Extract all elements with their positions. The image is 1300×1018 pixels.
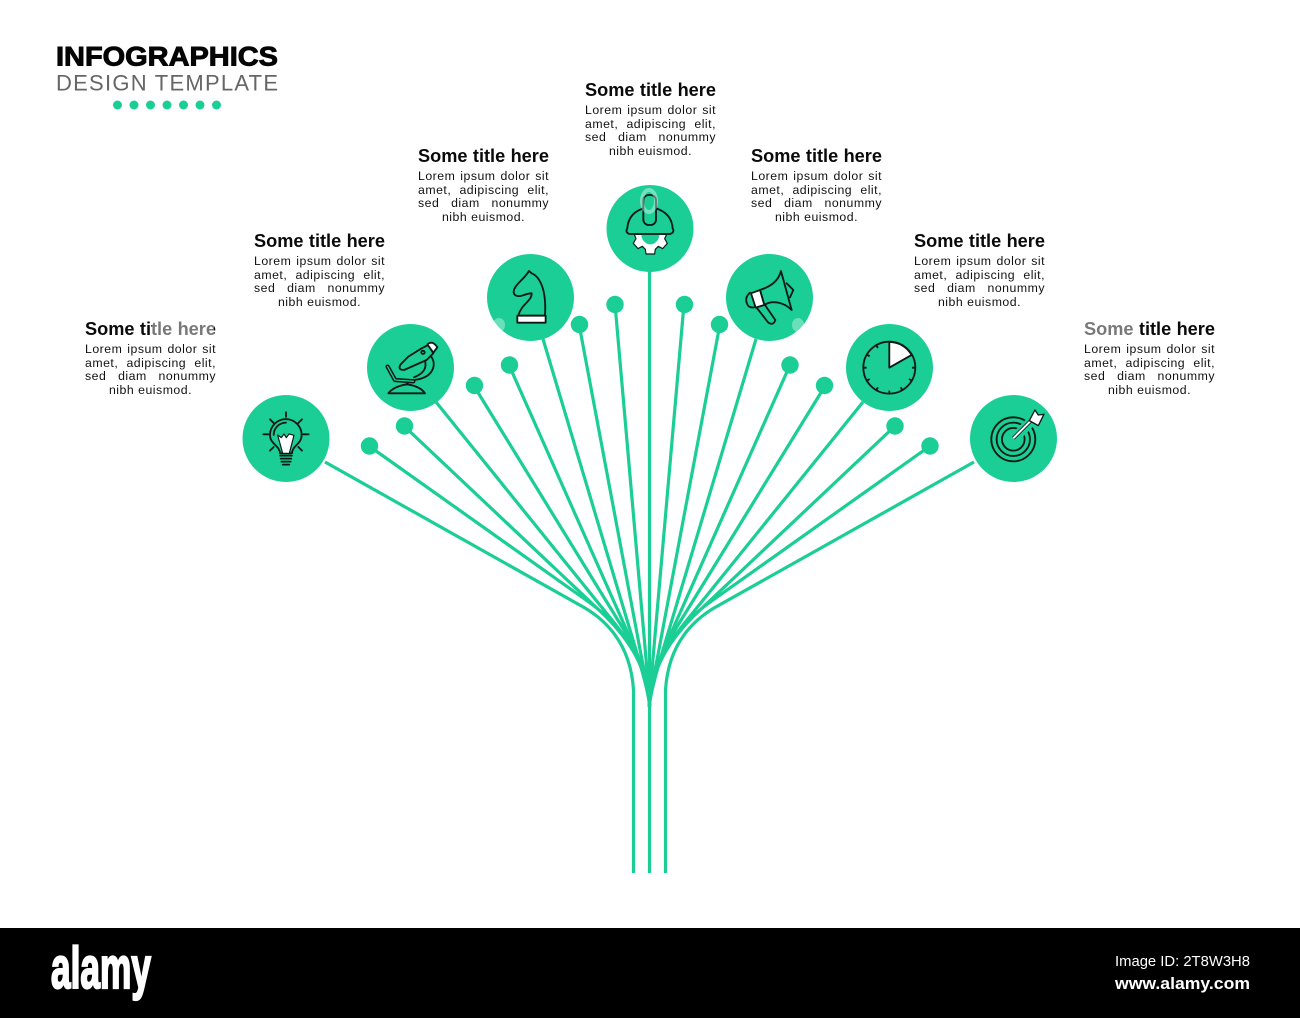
- text block 5: Some title here: [751, 146, 882, 166]
- icon circle: chess knight: [487, 254, 574, 341]
- text block 6: Some title here: [914, 231, 1045, 251]
- text block 6: amet, adipiscing elit,: [914, 268, 1045, 282]
- icon: helmet and gear: [627, 195, 673, 254]
- text block 7: Some title here: [1084, 319, 1215, 339]
- icon circle: light bulb: [242, 395, 330, 482]
- icon circle: helmet and gear: [606, 185, 694, 272]
- text block 6: sed diam nonummy: [914, 281, 1045, 295]
- icon circle: megaphone: [726, 254, 813, 341]
- text block 4: amet, adipiscing elit,: [585, 117, 716, 131]
- title: DESIGN TEMPLATE: [56, 70, 278, 96]
- footer image id: Image ID: 2T8W3H8: [1115, 953, 1250, 970]
- branch end dots: [361, 296, 939, 455]
- text block 5: nibh euismod.: [775, 210, 858, 224]
- title: [56, 42, 278, 96]
- text block 5: Lorem ipsum dolor sit: [751, 169, 882, 183]
- text block 1: sed diam nonummy: [85, 369, 216, 383]
- text block 7: Lorem ipsum dolor sit: [1084, 342, 1215, 356]
- footer url: www.alamy.com: [1114, 974, 1250, 993]
- text block 2: amet, adipiscing elit,: [254, 268, 385, 282]
- text block 5: [751, 146, 882, 224]
- text block 2: [254, 231, 385, 309]
- text block 6: Lorem ipsum dolor sit: [914, 254, 1045, 268]
- text block 6: nibh euismod.: [938, 295, 1021, 309]
- text block 4: [585, 80, 716, 158]
- icon circle: microscope: [367, 324, 454, 411]
- text block 3: Lorem ipsum dolor sit: [418, 169, 549, 183]
- text block 1: amet, adipiscing elit,: [85, 356, 216, 370]
- icon: clock: [863, 342, 915, 394]
- text block 2: Lorem ipsum dolor sit: [254, 254, 385, 268]
- text block 4: nibh euismod.: [609, 144, 692, 158]
- title dots: [113, 100, 221, 110]
- icon: light bulb: [263, 412, 309, 465]
- text block 1: Lorem ipsum dolor sit: [85, 342, 216, 356]
- text block 4: sed diam nonummy: [585, 130, 716, 144]
- icon: megaphone: [746, 271, 793, 324]
- text block 5: amet, adipiscing elit,: [751, 183, 882, 197]
- text block 1: nibh euismod.: [109, 383, 192, 397]
- footer logo: alamy: [51, 936, 151, 1001]
- text block 2: sed diam nonummy: [254, 281, 385, 295]
- text block 7: sed diam nonummy: [1084, 369, 1215, 383]
- text block 4: Some title here: [585, 80, 716, 100]
- text block 4: Lorem ipsum dolor sit: [585, 103, 716, 117]
- icon: chess knight: [514, 271, 546, 323]
- tree stem and branch lines: [325, 270, 974, 873]
- text block 3: sed diam nonummy: [418, 196, 549, 210]
- text block 3: amet, adipiscing elit,: [418, 183, 549, 197]
- text block 5: sed diam nonummy: [751, 196, 882, 210]
- icon circle: clock: [846, 324, 933, 411]
- icon: microscope: [388, 343, 437, 393]
- text block 3: [418, 146, 549, 224]
- icon circle: target: [970, 395, 1057, 482]
- text block 1: Some title here: [85, 319, 216, 339]
- footer bar: [0, 928, 1300, 1018]
- text block 1: [85, 319, 216, 397]
- icon: target with arrow: [991, 410, 1044, 461]
- text block 3: Some title here: [418, 146, 549, 166]
- text block 7: nibh euismod.: [1108, 383, 1191, 397]
- title: INFOGRAPHICS: [56, 42, 278, 72]
- text block 3: nibh euismod.: [442, 210, 525, 224]
- text block 6: [914, 231, 1045, 309]
- text block 2: Some title here: [254, 231, 385, 251]
- text block 7: [1084, 319, 1215, 397]
- text block 2: nibh euismod.: [278, 295, 361, 309]
- text block 7: amet, adipiscing elit,: [1084, 356, 1215, 370]
